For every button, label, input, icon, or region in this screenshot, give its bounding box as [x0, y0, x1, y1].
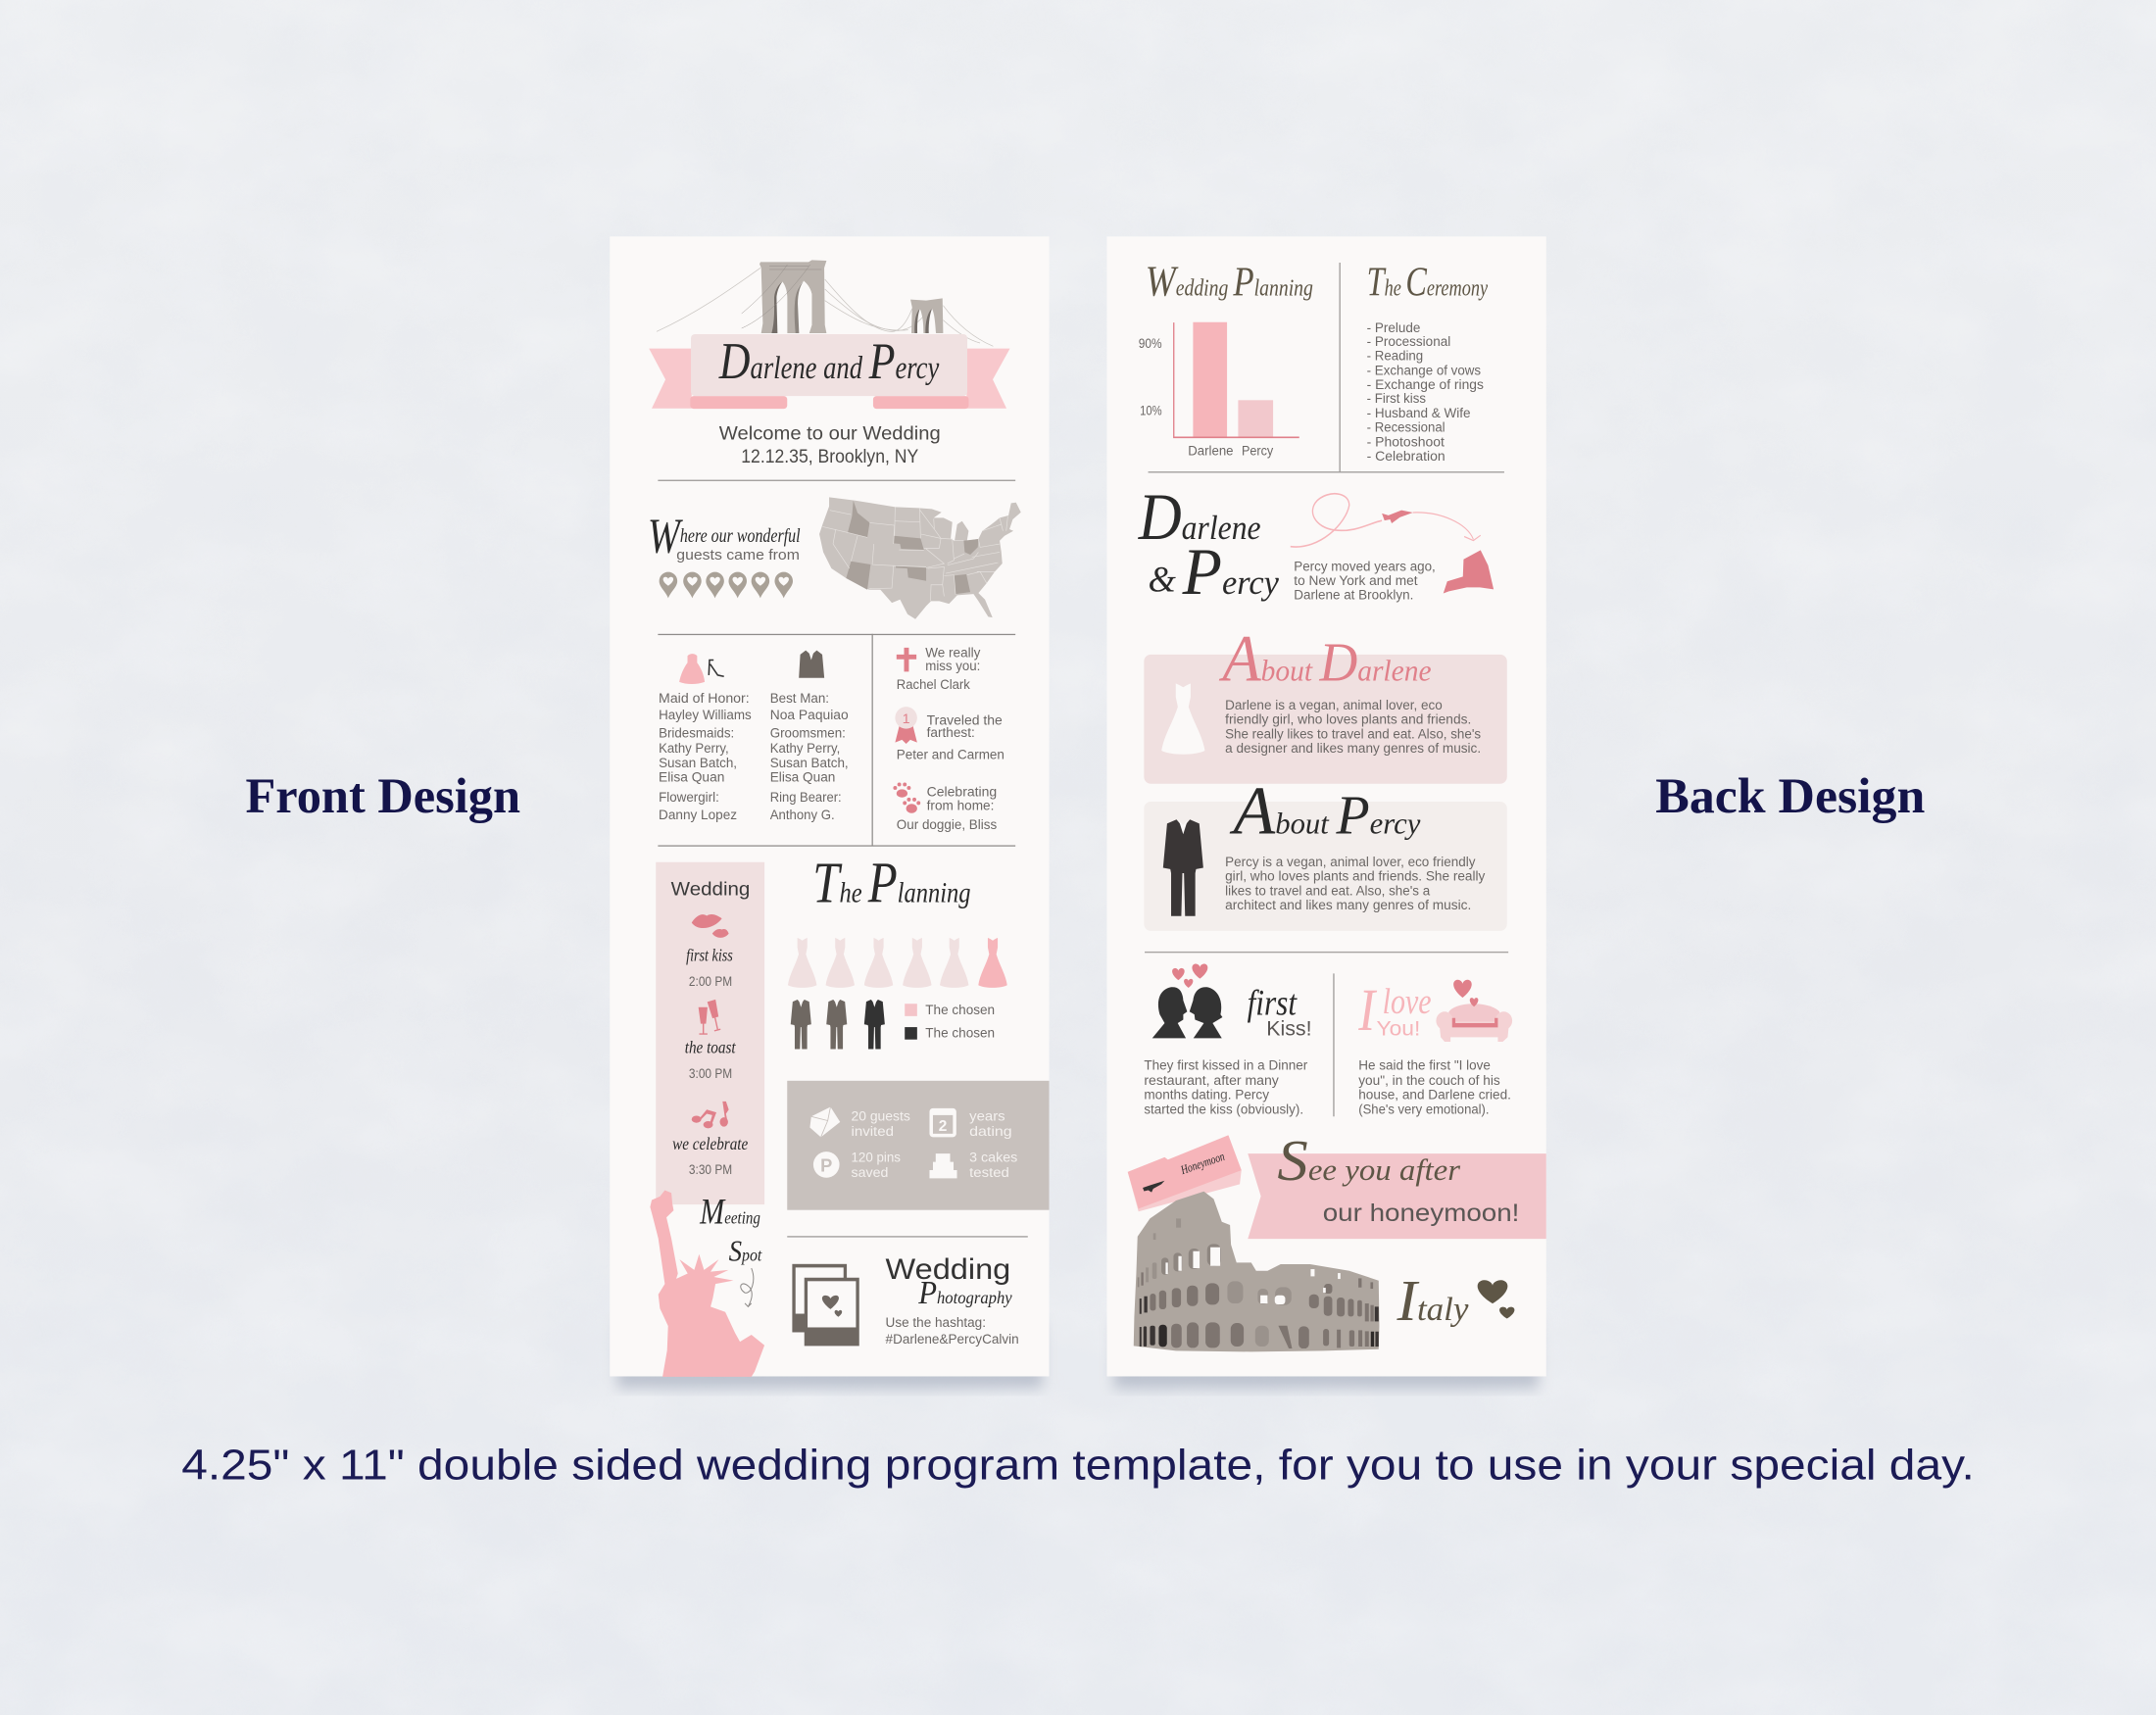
body text: a designer and likes many genres of music. [1225, 741, 1481, 756]
icon: calendar [929, 1108, 956, 1137]
text: celebrating: Our doggie, Bliss [897, 817, 997, 832]
icon: black suit [1163, 819, 1203, 916]
bar chart [1139, 322, 1299, 458]
stat: guests [851, 1107, 910, 1139]
heading: darlene and percy: & [1149, 560, 1177, 599]
text: we celebrate: we celebrate [672, 1134, 748, 1153]
panel: about percy [1144, 772, 1507, 931]
ticket [1128, 1135, 1242, 1211]
heading: the planning: The Planning [812, 850, 971, 914]
body text: Percy is a vegan, animal lover, eco friendly [1225, 855, 1476, 869]
text: bridal party: Susan Batch, [659, 756, 737, 770]
icon: lips [692, 914, 729, 938]
list: ceremony order: - Prelude [1367, 320, 1420, 335]
pictogram: suits [791, 1000, 885, 1050]
welcome text: Welcome to our Wedding [719, 423, 941, 444]
text: celebrating: from home: [927, 798, 994, 812]
text: bridal party: Maid of Honor: [659, 691, 750, 706]
list: ceremony order: - Celebration [1367, 449, 1446, 464]
body text: likes to travel and eat. Also, she's a [1225, 883, 1431, 898]
text: miss you [897, 646, 981, 692]
text: first kiss story: They first kissed in a Dinner [1144, 1058, 1308, 1073]
label: front design: Front Design [245, 768, 520, 823]
text: percy moved: Percy moved years ago, [1294, 559, 1436, 573]
text: miss you: We really [925, 646, 981, 661]
list: ceremony order: - Exchange of rings [1367, 377, 1484, 392]
heading: darlene and percy: Darlene [1138, 480, 1261, 554]
ribbon banner [649, 334, 1010, 409]
list: ceremony order: - Exchange of vows [1367, 363, 1481, 377]
list: ceremony order: - Photoshoot [1367, 434, 1445, 449]
heading: darlene and percy [1138, 480, 1279, 609]
stat: pins: 120 pins [851, 1150, 901, 1165]
welcome text: 12.12.35, Brooklyn, NY [741, 447, 919, 467]
text: percy moved: Darlene at Brooklyn. [1294, 588, 1413, 603]
text: i love you story: you", in the couch of his [1358, 1073, 1500, 1088]
icon: music notes [692, 1102, 729, 1128]
text: groom party: Kathy Perry, [770, 741, 840, 756]
body text: She really likes to travel and eat. Also, she's [1225, 726, 1481, 741]
icon: envelope [809, 1106, 840, 1137]
pictogram: dresses [788, 938, 1007, 988]
heading: i love you: I [1357, 977, 1377, 1044]
heading: i love you: love [1375, 982, 1432, 1021]
text: first kiss [686, 946, 733, 989]
text: we celebrate: 3:30 PM [689, 1162, 732, 1177]
text: first kiss story: started the kiss (obviously). [1144, 1102, 1303, 1116]
body text [1225, 698, 1481, 756]
heading: the ceremony: The Ceremony [1367, 260, 1488, 306]
text: first kiss: 2:00 PM [689, 974, 732, 989]
text: traveled [897, 712, 1004, 761]
heading: i love you: You! [1376, 1018, 1420, 1041]
text: first kiss story [1144, 1058, 1308, 1116]
text: groom party: Susan Batch, [770, 756, 849, 770]
heading: darlene and percy: Percy [1182, 535, 1279, 609]
timeline heading: Wedding [671, 878, 750, 900]
stat: guests: invited [851, 1123, 894, 1139]
stat: pins: saved [851, 1164, 888, 1180]
stat: cakes: 3 cakes [969, 1150, 1017, 1165]
text: groom party: Groomsmen: [770, 726, 846, 741]
text: miss you: miss you: [925, 659, 980, 673]
stat: cakes [969, 1150, 1017, 1180]
illustration: colosseum [1134, 1192, 1379, 1351]
label: back design: Back Design [1655, 768, 1925, 823]
icon: medal [895, 707, 917, 744]
icon: pinterest: P [820, 1154, 832, 1175]
bar chart: Percy [1242, 443, 1273, 458]
text: the toast: 3:00 PM [689, 1066, 732, 1081]
icon: calendar: 2 [939, 1118, 947, 1135]
text: see you after: See you after [1277, 1128, 1461, 1193]
heading: guests [648, 509, 801, 564]
text: first kiss story: restaurant, after many [1144, 1073, 1279, 1088]
illustration: brooklyn bridge [657, 260, 993, 346]
icon: pinterest [813, 1152, 840, 1178]
caption: 4.25" x 11" double sided wedding program template, for you to use in your special day. [181, 1443, 1975, 1490]
heading: first kiss [1248, 983, 1312, 1041]
panel: wedding timeline [656, 862, 764, 1204]
legend: The chosen [925, 1026, 995, 1041]
text: groom party: Noa Paquiao [770, 708, 849, 722]
heading: first kiss: first [1248, 983, 1298, 1022]
text: bridal party: Elisa Quan [659, 770, 724, 785]
text: i love you story: He said the first "I love [1358, 1058, 1491, 1073]
heading: wedding planning: Wedding Planning [1146, 257, 1313, 306]
welcome text [719, 423, 941, 467]
stat: years: years [969, 1107, 1005, 1123]
heading: italy: Italy [1396, 1268, 1469, 1333]
body text: Darlene is a vegan, animal lover, eco [1225, 698, 1443, 712]
text: meeting spot [699, 1193, 762, 1268]
text: hashtag: #Darlene&PercyCalvin [886, 1332, 1019, 1347]
banner: honeymoon [1248, 1153, 1546, 1239]
icon row: location pins [660, 572, 793, 598]
icon: champagne glasses [699, 1001, 720, 1034]
bar chart: 10% [1140, 404, 1162, 418]
illustration: statue of liberty [650, 1190, 764, 1377]
list: ceremony order: - Processional [1367, 334, 1450, 349]
text: celebrating: Celebrating [927, 784, 997, 799]
bar chart: Darlene [1188, 443, 1234, 458]
list: ceremony order: - First kiss [1367, 391, 1426, 406]
arrow: curl [741, 1268, 754, 1306]
text: bridal party [659, 691, 752, 822]
text: percy moved: to New York and met [1294, 573, 1418, 588]
text: meeting spot: Meeting [699, 1193, 760, 1232]
heading: About Percy [1230, 772, 1421, 849]
list: ceremony order: - Recessional [1367, 420, 1446, 435]
stat: guests: 20 guests [851, 1107, 910, 1123]
text: percy moved [1294, 559, 1436, 603]
icon: cake [929, 1153, 957, 1178]
heading: first kiss: Kiss! [1266, 1018, 1312, 1041]
map: new york state [1444, 550, 1494, 593]
legend: The chosen [925, 1003, 995, 1017]
body text: girl, who loves plants and friends. She really [1225, 869, 1486, 884]
icon: white dress [1161, 683, 1204, 755]
text: first kiss: first kiss [686, 946, 733, 965]
text: groom party: Elisa Quan [770, 770, 835, 785]
map: united states [819, 497, 1021, 619]
list: ceremony order: - Husband & Wife [1367, 406, 1471, 420]
text: groom party [770, 691, 849, 822]
heading: wedding photography: Photography [917, 1275, 1012, 1311]
stat: pins [851, 1150, 901, 1180]
text: bridal party: Flowergirl: [659, 790, 719, 805]
panel: front card [610, 236, 1050, 1377]
text: we celebrate [672, 1134, 748, 1177]
text: the toast [685, 1038, 736, 1081]
heading: wedding photography [886, 1253, 1012, 1311]
text: our honeymoon: our honeymoon! [1323, 1200, 1519, 1227]
text: bridal party: Hayley Williams [659, 708, 752, 722]
legend [905, 1003, 995, 1041]
text: first kiss story: months dating. Percy [1144, 1088, 1269, 1102]
icon: jacket [799, 651, 824, 678]
icon: sofa with hearts [1436, 980, 1512, 1042]
body text: architect and likes many genres of music. [1225, 898, 1471, 912]
heading: i love you [1357, 977, 1432, 1044]
heading: guests: here our wonderful [680, 525, 801, 547]
icon: cross [897, 648, 916, 671]
heading: wedding photography: Wedding [886, 1253, 1010, 1286]
text: traveled: Traveled the [927, 712, 1003, 727]
body text [1225, 855, 1486, 912]
heading: guests: guests came from [676, 548, 800, 564]
list: ceremony order: - Reading [1367, 349, 1423, 364]
text: bridal party: Bridesmaids: [659, 726, 734, 741]
text: bridal party: Danny Lopez [659, 808, 737, 822]
icon: photographs [792, 1264, 859, 1346]
text: groom party: Ring Bearer: [770, 790, 842, 805]
flight path with plane [1291, 494, 1481, 547]
title: names: Darlene and Percy [718, 331, 940, 390]
body text: friendly girl, who loves plants and friends. [1225, 712, 1471, 727]
text: celebrating [897, 784, 997, 832]
stat: cakes: tested [969, 1164, 1009, 1180]
text: the toast: the toast [685, 1038, 736, 1057]
bar chart: 90% [1139, 336, 1162, 351]
text: bridal party: Kathy Perry, [659, 741, 729, 756]
text: groom party: Best Man: [770, 691, 829, 706]
stat: years: dating [969, 1123, 1012, 1139]
text: traveled: farthest: [927, 725, 975, 740]
text: miss you: Rachel Clark [897, 677, 970, 692]
panel: stats [787, 1081, 1050, 1210]
ticket: Honeymoon [1178, 1150, 1226, 1177]
heading: About Darlene [1218, 622, 1432, 696]
text: i love you story: house, and Darlene cried. [1358, 1088, 1511, 1102]
stat: years [969, 1107, 1012, 1139]
panel: about darlene [1144, 622, 1507, 784]
card shadows [617, 1320, 1539, 1389]
icon: high heel [709, 660, 724, 676]
text: i love you story [1358, 1058, 1511, 1116]
text: meeting spot: Spot [729, 1235, 762, 1268]
text: hashtag: Use the hashtag: [886, 1315, 986, 1330]
text: i love you story: (She's very emotional). [1358, 1102, 1490, 1116]
list: ceremony order [1367, 320, 1484, 464]
text: traveled: Peter and Carmen [897, 747, 1004, 761]
panel: back card [1106, 236, 1546, 1376]
heading: guests: W [648, 509, 683, 564]
icon: bridesmaid dress [679, 654, 705, 684]
text: groom party: Anthony G. [770, 808, 835, 822]
icon: kissing couple [1152, 963, 1222, 1038]
icon: brown hearts [1478, 1280, 1514, 1319]
icon: paw prints [893, 782, 920, 813]
icon: medal: 1 [903, 710, 910, 726]
text: hashtag [886, 1315, 1019, 1347]
